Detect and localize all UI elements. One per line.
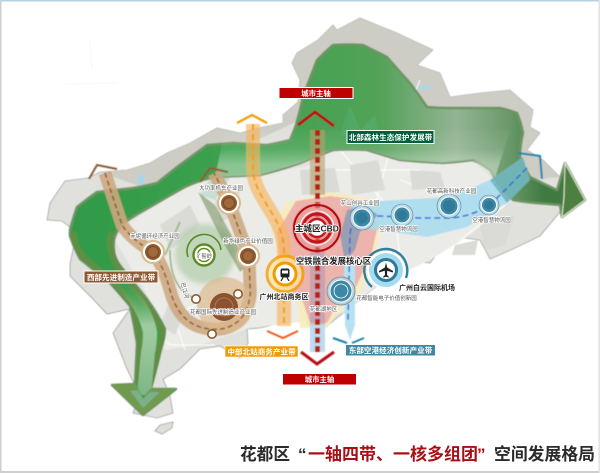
green belt: north forest and western arm	[70, 44, 585, 415]
west arrowhead inner	[130, 390, 160, 408]
band fade toward urban edge	[215, 130, 510, 178]
map artwork	[47, 18, 585, 434]
node: high-tech	[437, 194, 461, 218]
city road network	[130, 80, 505, 350]
title: ”	[477, 445, 486, 464]
place labels: 大功率机车产业园	[199, 184, 243, 192]
node: Xinhua	[237, 245, 259, 267]
northern gray hills	[100, 18, 560, 190]
node: electronics	[327, 277, 355, 305]
small white nodes	[192, 290, 242, 338]
island	[155, 422, 173, 434]
label: east airport belt: 东部空港经济创新产业带	[349, 345, 433, 355]
airport node	[364, 249, 407, 289]
yellow halo around core	[274, 192, 381, 328]
faint watermark	[65, 38, 118, 84]
orange central business belt	[237, 115, 298, 338]
title: 一轴四带、一核多组团	[308, 444, 478, 464]
place labels: 花都智能电子价值创新园	[356, 294, 417, 302]
place labels: 巴江河	[179, 281, 191, 300]
place labels: 空港智慧物流园	[379, 225, 418, 233]
label: main axis top: 城市主轴	[301, 89, 331, 98]
western arm dark edges	[73, 232, 162, 389]
place labels: 花都国际先进制造业产业园	[190, 308, 256, 316]
place labels: 丫髻岭	[196, 252, 213, 260]
node: Yajiling	[187, 234, 221, 266]
east and south-east chevrons	[333, 153, 542, 343]
label: main axis top	[279, 88, 353, 98]
place labels: 花都湖地区	[310, 305, 338, 313]
title: 花都区	[240, 445, 290, 464]
node: advanced manufacturing	[210, 293, 238, 321]
brown western manufacturing belt	[89, 165, 253, 333]
label: central business belt: 中部北站商务产业带	[227, 347, 296, 357]
label: main axis bottom	[283, 374, 356, 384]
node: logistics two	[479, 195, 499, 215]
title: “	[298, 445, 306, 464]
forest water streaks	[200, 105, 380, 200]
label: north forest belt	[347, 130, 434, 144]
label: airport: 广州白云国际机场	[399, 283, 455, 292]
place labels	[130, 184, 511, 316]
built-up texture patches	[160, 160, 515, 335]
place labels: 花都高新科技产业园	[427, 187, 477, 195]
east arrowhead	[562, 163, 585, 217]
urban built-up area	[115, 150, 513, 350]
place labels: 空港智慧物流园	[472, 216, 511, 224]
label: main axis bottom: 城市主轴	[305, 375, 334, 384]
west arrowhead	[112, 384, 176, 415]
label: core zone: 空铁融合发展核心区	[296, 256, 372, 266]
CBD target	[292, 203, 342, 253]
label: north station: 广州北站商务区	[260, 292, 308, 301]
water body	[137, 85, 433, 186]
node: Huashan	[350, 206, 374, 230]
title	[240, 444, 595, 464]
label: CBD: 主城区CBD	[295, 224, 339, 234]
western arm pale center	[95, 250, 150, 395]
pink core area	[277, 196, 378, 323]
place labels: 赤坭循环经济产业园	[130, 232, 180, 240]
blue east airport belt	[340, 157, 530, 340]
main city axis	[298, 112, 334, 364]
industrial cluster circle	[197, 277, 253, 333]
label: west manufacturing belt	[84, 271, 158, 283]
title: 空间发展格局	[494, 444, 595, 464]
blue park nodes	[327, 194, 499, 305]
node: Chini	[142, 241, 164, 263]
label: north forest belt: 北部森林生态保护发展带	[349, 132, 433, 142]
label: west manufacturing belt: 西部先进制造产业带	[87, 272, 156, 282]
hillside green around Yajiling	[165, 192, 248, 298]
node: logistics one	[391, 204, 413, 226]
place labels: 新华绿色产业价值园	[223, 237, 273, 245]
train station node	[267, 256, 303, 292]
place labels: 花山创谷工业园	[341, 199, 380, 207]
node: Dagonglv	[218, 192, 240, 214]
district land outline	[47, 18, 567, 418]
